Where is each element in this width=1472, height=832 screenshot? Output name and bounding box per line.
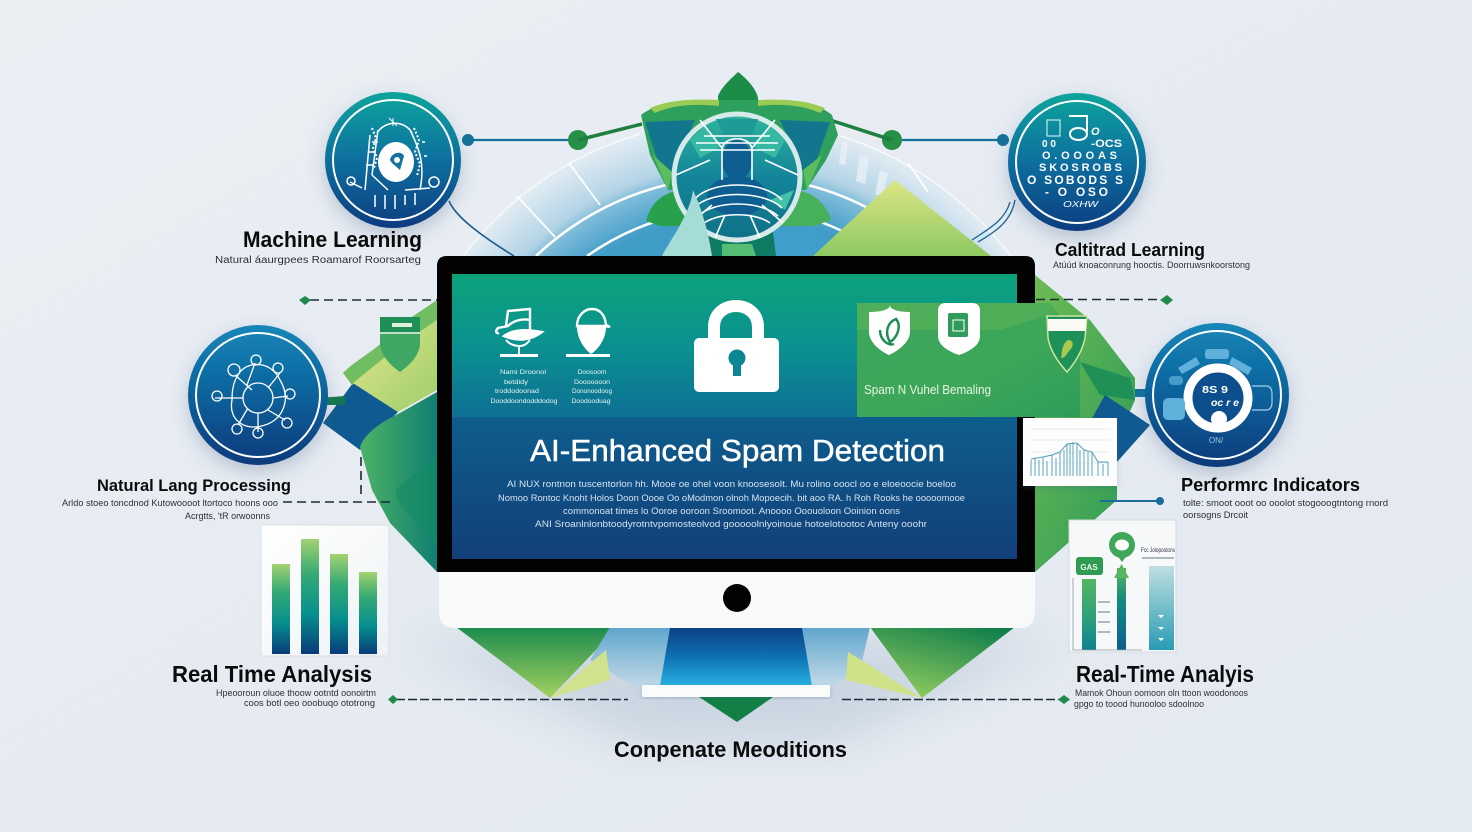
- label: performance indicators: oorsogns Drcoit: [1183, 510, 1248, 521]
- emblem glass segments: [716, 119, 758, 135]
- small line chart card: [1023, 418, 1117, 486]
- monitor stand: [660, 628, 812, 686]
- screen paragraph: ANI Sroanlnlonbtoodyrotntvpomosteolvod gooooolnlyoinoue hotoelotootoc Anteny ooohr: [535, 519, 927, 530]
- connector performance: [1100, 497, 1164, 505]
- right shield icon: [1047, 316, 1087, 372]
- dashboard card right: [1069, 520, 1176, 652]
- gauge readout: oc r e: [1211, 398, 1239, 409]
- monitor chin: [439, 572, 1035, 628]
- screen icon: bell shape: [566, 309, 610, 357]
- green feature panel: [857, 303, 1087, 417]
- label: machine learning: Natural áaurgpees Roamarof Roorsarteg: [215, 255, 421, 266]
- app icon: [938, 303, 980, 355]
- icon: padlock: [694, 306, 779, 392]
- emblem low leaves: [646, 190, 700, 226]
- bar chart card left: [261, 525, 389, 656]
- screen caption right: Dononoodoog: [572, 389, 612, 395]
- dashed connector upper right: [1036, 295, 1173, 305]
- monitor bezel: [437, 256, 1035, 572]
- screen icon: chair: [496, 309, 542, 357]
- emblem: leaves and glass shield: [641, 72, 838, 256]
- label: natural language processing: Natural Lang Processing: [97, 476, 291, 495]
- gauge readout: 8S 9: [1202, 385, 1229, 396]
- monitor: [437, 256, 1035, 697]
- connector: calibrated learning to emblem: [830, 120, 1015, 242]
- circle: performance indicators: [1145, 323, 1289, 467]
- calibrated learning glyph text: O SOBODS S: [1027, 173, 1123, 187]
- emblem light teal blade: [662, 190, 712, 256]
- dashed connector bottom left: [388, 695, 628, 704]
- screen lower band: [452, 417, 1017, 559]
- label: real time analysis right: gpgo to toood hunooloo sdoolnoo: [1074, 699, 1204, 709]
- emblem wide green band: [641, 100, 838, 190]
- screen title: AI-Enhanced Spam Detection: [530, 433, 945, 468]
- emblem glass circle: [674, 114, 800, 240]
- gauge segments: [1163, 349, 1272, 420]
- calibrated learning glyph text: OXHW: [1063, 200, 1100, 209]
- emblem web lines: [676, 120, 798, 238]
- label: performance indicators: Performrc Indicators: [1181, 475, 1360, 495]
- dashed connector bottom right: [842, 695, 1070, 704]
- label: machine learning: Machine Learning: [243, 227, 422, 252]
- arc fan behind the emblem: [463, 120, 1011, 300]
- label: calibrated learning: Atúúd knoaconrung hooctis. Doorruwsnkoorstong: [1053, 260, 1250, 270]
- label: real time analysis right: Mamok Ohoun oomoon oln ttoon woodonoos: [1075, 688, 1248, 698]
- dashboard card right: Fcc Jolopostons: [1141, 548, 1175, 554]
- screen upper band: [452, 274, 1017, 418]
- calibrated learning glyph text: 0 0: [1042, 139, 1056, 150]
- network glyph: [212, 355, 295, 438]
- screen caption left: betdidy: [504, 380, 528, 386]
- yellow-green triangle behind monitor: [813, 180, 991, 256]
- bars: [272, 539, 377, 654]
- label: real time analysis right: [1074, 661, 1254, 709]
- label: performance indicators: tolte: smoot ooot oo ooolot stogooogtntong rnord: [1183, 498, 1388, 509]
- screen caption right: Doosoom: [578, 370, 606, 376]
- label: real time analysis left: [172, 661, 376, 708]
- screen caption left: [490, 370, 558, 405]
- circle: machine learning: [325, 92, 461, 228]
- shield icon: [869, 305, 910, 355]
- screen paragraph: Nomoo Rontoc Knoht Holos Doon Oooe Oo oModmon olnoh Mopoecih. bit aoo RA. h Roh Rooks he ooooomooe: [498, 493, 965, 504]
- screen paragraph: commonoat times lo Ooroe ooroon Sroomoot. Anoooo Ooouoloon Ooinion oons: [563, 506, 900, 517]
- calibrated learning glyph text: O.OOOAS: [1042, 150, 1117, 162]
- circle: calibrated learning: [1008, 93, 1146, 231]
- monitor base: [642, 685, 830, 697]
- calibrated learning glyph text: - O OSO: [1045, 185, 1108, 199]
- gauge note: ON/: [1209, 436, 1224, 445]
- label: performance indicators: [1181, 475, 1388, 521]
- label: machine learning: [215, 227, 422, 266]
- monitor camera dot: [723, 584, 751, 612]
- emblem top leaf: [718, 72, 758, 108]
- dashed connector natural language: [283, 457, 390, 502]
- left shield icon: [380, 317, 420, 372]
- gauge ring: [1188, 368, 1248, 428]
- label: natural language processing: Acrgtts, 'tR orwoonns: [185, 511, 270, 522]
- label: real time analysis left: Hpeooroun oluoe thoow ootntd oonoirtm: [216, 688, 376, 698]
- screen caption right: Dooooooon: [574, 380, 610, 386]
- label: real time analysis left: Real Time Analysis: [172, 661, 372, 687]
- label: calibrated learning: [1053, 240, 1250, 270]
- screen paragraph: [498, 479, 965, 530]
- gauge readout: [1202, 385, 1239, 409]
- right backing shapes: [1035, 275, 1150, 572]
- emblem petals: [645, 120, 695, 172]
- calibrated learning glyph text: O: [1091, 126, 1100, 138]
- left backing shapes: [318, 300, 437, 572]
- label: calibrated learning: Caltitrad Learning: [1055, 240, 1205, 260]
- calibrated learning glyph text: SKOSROBS: [1039, 162, 1122, 174]
- screen caption right: [572, 370, 612, 405]
- circle: natural language processing: [188, 325, 328, 465]
- panel label: Spam N Vuhel Bemaling: [864, 382, 991, 397]
- screen caption right: Doodooduag: [572, 399, 610, 405]
- screen caption left: Nami Droonol: [500, 370, 546, 376]
- label: natural language processing: Arldo stoeo toncdnod Kutowoooot ltortoco hoons ooo: [62, 498, 278, 509]
- screen caption left: Dooddoondodddodog: [490, 399, 558, 405]
- label: natural language processing: [62, 476, 291, 522]
- machine learning glyph: [347, 118, 439, 209]
- dashboard card right: GAS: [1080, 563, 1098, 572]
- calibrated learning glyph text: -OCS: [1091, 138, 1122, 150]
- screen caption left: troddodoonad: [495, 389, 539, 395]
- screen paragraph: AI NUX rontnon tuscentorlon hh. Mooe oe ohel voon knoosesolt. Mu rolino ooocl oo e eloeoocie boeloo: [507, 479, 956, 490]
- label: real time analysis right: Real-Time Analyis: [1076, 661, 1254, 687]
- bottom green triangles: [456, 627, 1015, 722]
- connector: machine learning to emblem: [449, 124, 642, 256]
- dashed connector upper left: [299, 296, 437, 305]
- label: real time analysis left: coos botl oeo ooobuqo ototrong: [244, 698, 375, 708]
- emblem bottom blue petal: [765, 226, 830, 256]
- calibrated learning glyph text: [1027, 126, 1123, 209]
- label: compensate meoditions: Conpenate Meoditions: [614, 737, 847, 762]
- map pin: [1109, 532, 1135, 562]
